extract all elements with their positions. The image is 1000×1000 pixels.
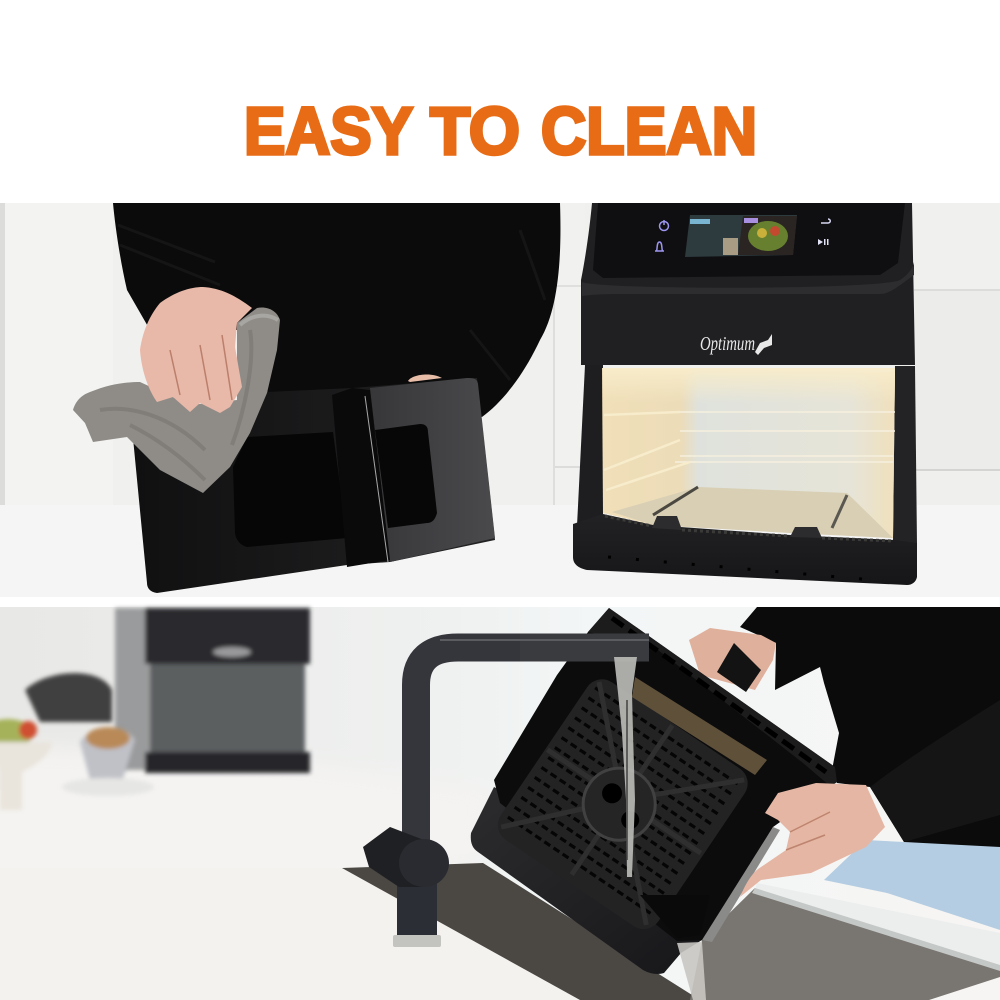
blurred food on table (0, 673, 154, 810)
brand mark: Optimum (700, 333, 755, 355)
brown sticker (632, 677, 767, 775)
water stream (614, 657, 706, 1000)
blurred appliance in background (115, 608, 310, 773)
air fryer screen (685, 215, 797, 257)
control icons (655, 220, 668, 251)
sink (342, 863, 1000, 1000)
grey cloth (73, 308, 280, 493)
person in black sweater (113, 203, 560, 417)
basket (471, 608, 837, 974)
sweater (740, 607, 1000, 847)
air fryer appliance (573, 203, 917, 585)
lower hand (740, 783, 885, 897)
basket handle (717, 643, 761, 692)
hand on door edge (408, 374, 442, 382)
bottom photo: rinsing basket under tap (0, 607, 1000, 1000)
water pool (640, 895, 710, 938)
hand on cloth (140, 287, 252, 413)
title: TO (430, 94, 520, 169)
top photo: wiping air fryer door (0, 203, 1000, 597)
air fryer door panel (133, 378, 495, 593)
title: EASY (244, 94, 413, 169)
upper hand (689, 628, 776, 690)
title (244, 94, 757, 169)
rim slots (612, 618, 826, 772)
oven interior (602, 368, 895, 538)
grate (491, 672, 755, 936)
base screws (608, 557, 862, 579)
basket rim and body (494, 608, 837, 941)
faucet (363, 640, 649, 947)
title: CLEAN (541, 94, 757, 169)
jeans (824, 840, 1000, 930)
basket outer side (471, 787, 702, 974)
